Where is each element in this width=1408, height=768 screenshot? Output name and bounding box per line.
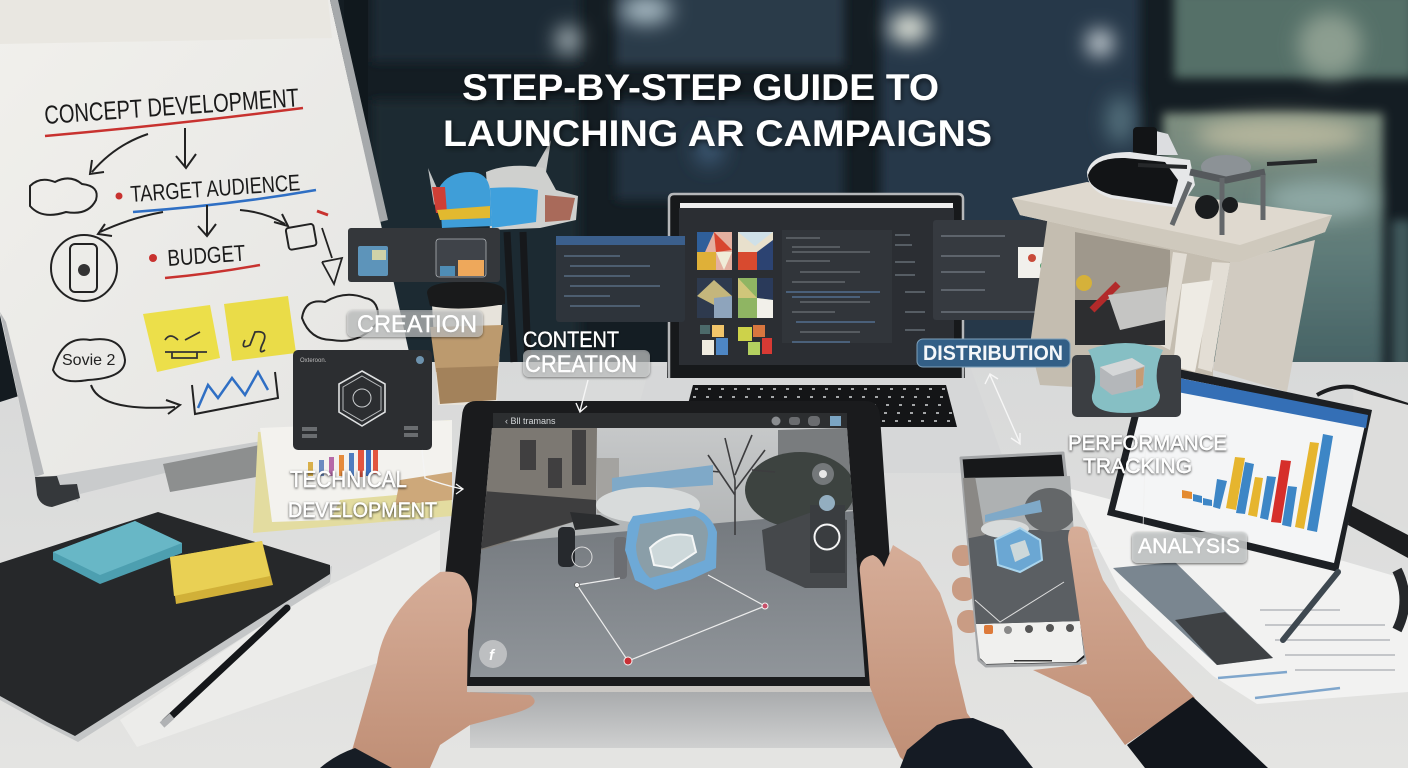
whiteboard corner bracket bbox=[35, 476, 80, 507]
phone fingers bbox=[952, 545, 981, 633]
people in scene bbox=[558, 527, 627, 579]
drone bbox=[1138, 155, 1317, 235]
laptop bbox=[620, 194, 1002, 473]
central tablet AR app bbox=[442, 401, 892, 692]
floating code panel left bbox=[556, 236, 685, 322]
sticky note: yellow left bbox=[143, 305, 220, 372]
label: analysis bbox=[1132, 532, 1247, 563]
documents lower right bbox=[1067, 488, 1408, 704]
sleeve left of phone bbox=[900, 718, 1033, 768]
keyboard bbox=[682, 385, 957, 427]
label: creation: CREATION bbox=[357, 311, 477, 338]
shelf with VR headset and drone bbox=[1012, 127, 1332, 395]
sticky note: yellow right bbox=[224, 296, 296, 361]
sticky pad: teal bbox=[53, 521, 182, 584]
floating AR cube panel bbox=[1072, 343, 1181, 417]
laptop screen colour tiles bbox=[697, 232, 773, 355]
background window wall bbox=[0, 0, 1408, 410]
floating code panel right bbox=[933, 220, 1075, 320]
label: technical development bbox=[288, 466, 437, 522]
phone AR app bbox=[960, 453, 1086, 666]
arrow: distribution to phone bbox=[985, 374, 1020, 444]
AR tracking lines bbox=[574, 575, 768, 665]
label: distribution: DISTRIBUTION bbox=[923, 342, 1063, 365]
pen bbox=[162, 608, 287, 725]
desk surface bbox=[0, 362, 1408, 768]
connector lines bbox=[1093, 440, 1162, 548]
label: performance tracking: TRACKING bbox=[1083, 455, 1192, 478]
coffee cup bbox=[427, 232, 528, 405]
label: performance tracking: PERFORMANCE bbox=[1068, 432, 1227, 455]
AR toy model bbox=[428, 140, 578, 230]
right hand on tablet bbox=[860, 545, 972, 762]
label: technical development: DEVELOPMENT bbox=[288, 499, 437, 522]
whiteboard panel: concept development bbox=[0, 0, 425, 507]
text: target audience: TARGET AUDIENCE bbox=[130, 169, 301, 207]
title: LAUNCHING AR CAMPAIGNS bbox=[443, 113, 992, 154]
text: budget: BUDGET bbox=[167, 240, 246, 271]
code lines bbox=[782, 230, 925, 343]
right edge device bbox=[1317, 387, 1408, 558]
camera button bbox=[479, 640, 507, 668]
app toolbar bbox=[493, 413, 847, 428]
lower-left notebook with sticky notes and pen bbox=[0, 512, 332, 742]
shadow under tablet bbox=[470, 692, 900, 748]
left hand bbox=[320, 572, 535, 768]
hand holding phone bbox=[1033, 527, 1268, 768]
label: performance tracking bbox=[1068, 432, 1227, 478]
papers under technical panel bbox=[253, 420, 452, 533]
app toolbar: ‹ Bll tramans bbox=[505, 416, 556, 426]
VR headset bbox=[1087, 127, 1195, 208]
label: analysis: ANALYSIS bbox=[1138, 535, 1240, 558]
heading: concept development: CONCEPT DEVELOPMENT bbox=[43, 82, 300, 130]
bar chart bbox=[1182, 434, 1333, 532]
whiteboard panel: concept development: Sovie 2 bbox=[62, 352, 115, 369]
blank paper under pen bbox=[120, 530, 440, 747]
label: technical development: TECHNICAL bbox=[290, 466, 407, 492]
label: content creation bbox=[523, 327, 650, 378]
title: STEP-BY-STEP GUIDE TO bbox=[462, 67, 939, 108]
AR street scene bbox=[470, 428, 866, 677]
title bbox=[443, 67, 992, 154]
shelf clutter bbox=[1075, 275, 1167, 345]
label: content creation: CREATION bbox=[525, 351, 637, 378]
tablet charts panel: performance tracking bbox=[1107, 362, 1372, 572]
floating panel: technical development hexagon: Oxteroon. bbox=[300, 358, 327, 364]
sticky pad: yellow bbox=[170, 541, 273, 604]
AR floating object bbox=[596, 465, 717, 590]
marker tray bbox=[163, 445, 262, 492]
label: content creation: CONTENT bbox=[523, 327, 619, 352]
arrow: content creation to tablet bbox=[576, 380, 588, 412]
floating panel: creation screen bbox=[348, 228, 500, 282]
pen on documents bbox=[1283, 572, 1338, 640]
camera button: f bbox=[489, 647, 496, 664]
phone app icons bbox=[984, 624, 1074, 662]
floating panel: technical development hexagon bbox=[293, 350, 432, 450]
arrow: technical development to tablet bbox=[422, 450, 463, 494]
